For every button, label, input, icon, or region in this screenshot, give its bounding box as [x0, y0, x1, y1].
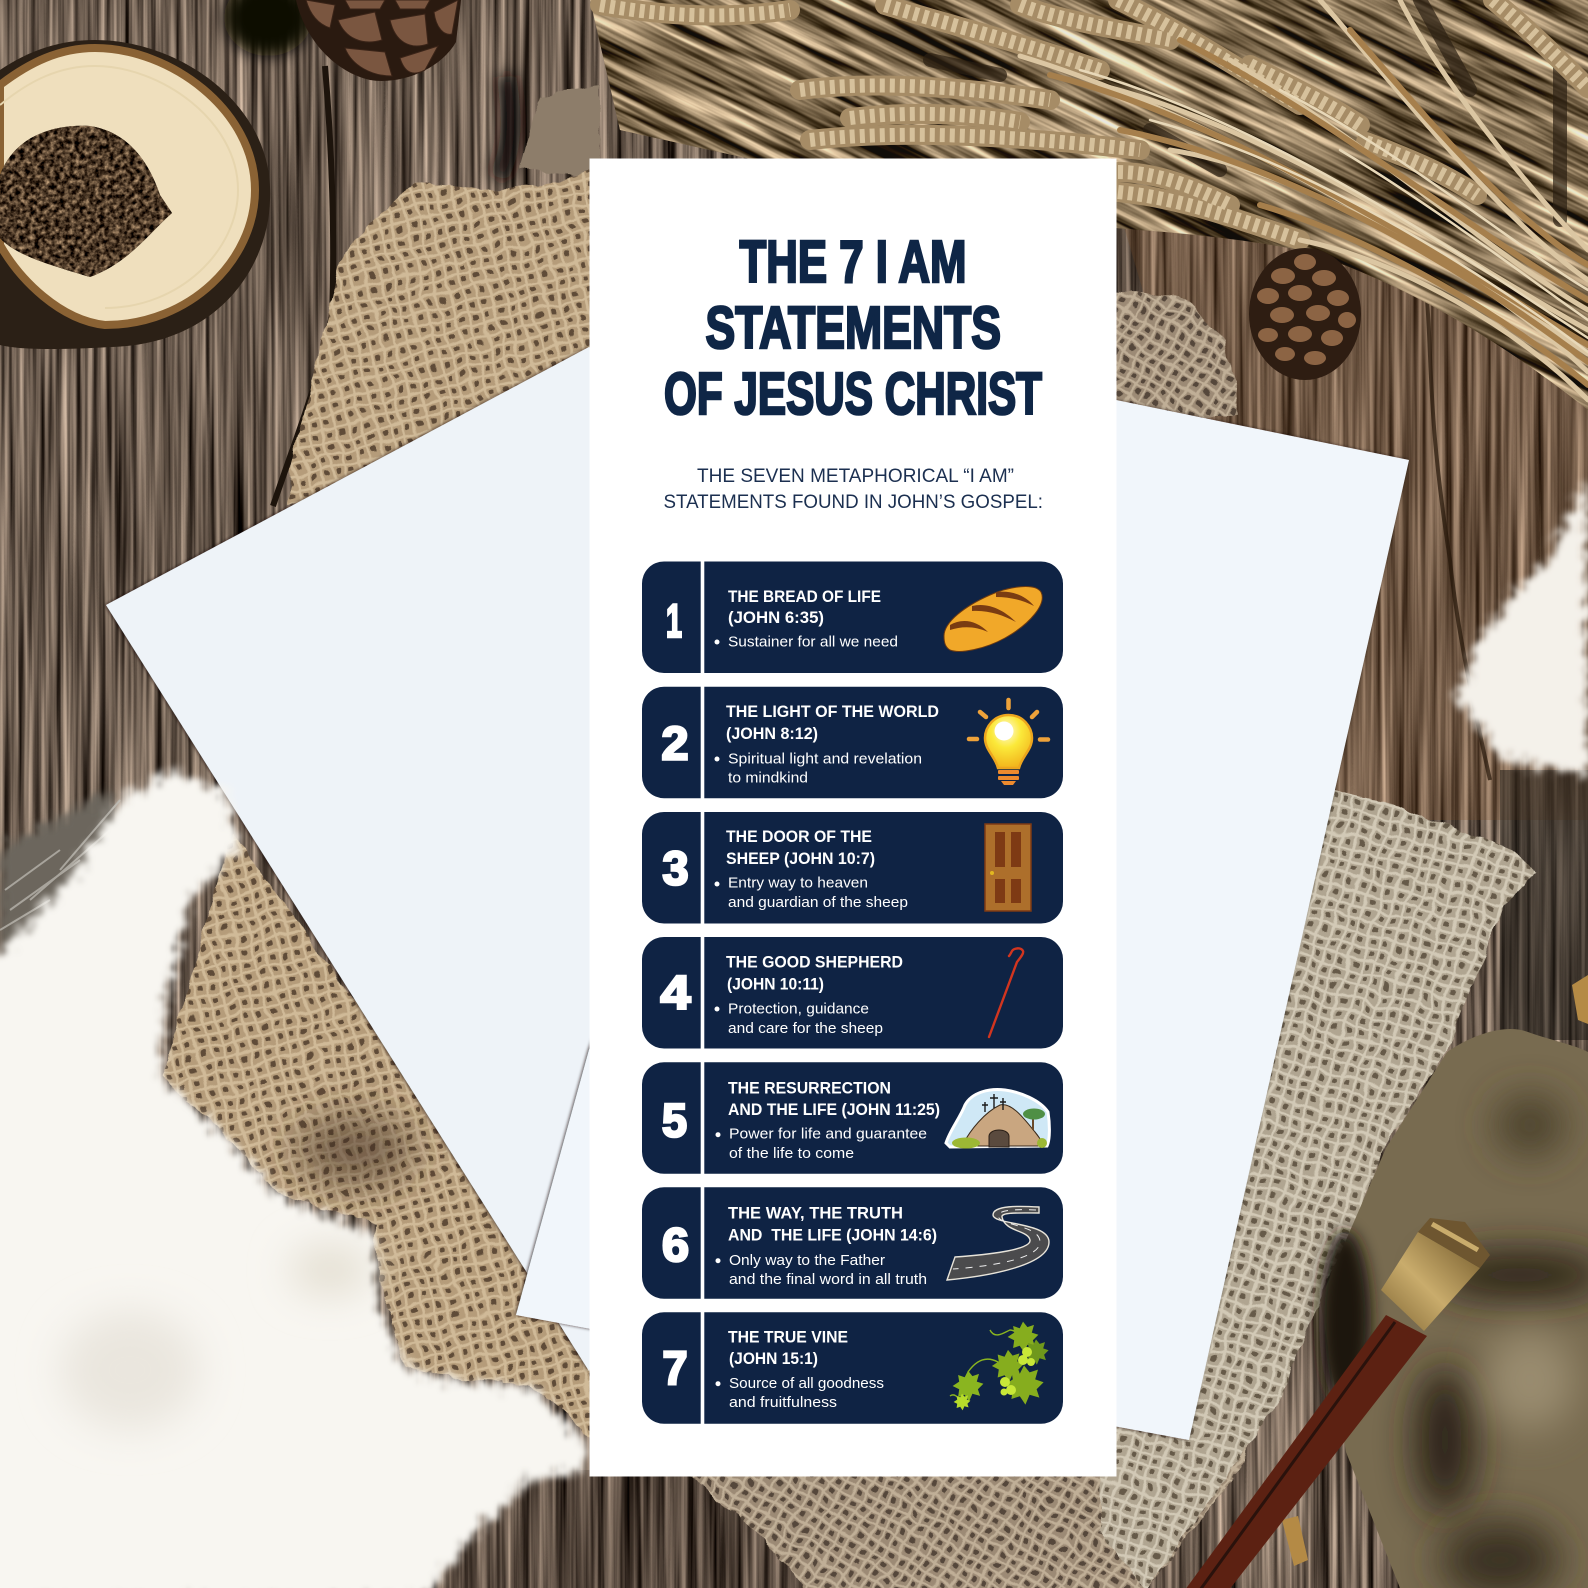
- statement 7: true vine: and fruitfulness: [729, 1395, 837, 1411]
- icon: empty tomb: [946, 1090, 1049, 1148]
- statement 1: bread of life: Sustainer for all we need: [728, 634, 898, 650]
- title: THE 7 I AM: [740, 229, 966, 295]
- statement 2: light of the world: Spiritual light and revelation: [728, 751, 922, 767]
- statement 5: resurrection and the life: [642, 1062, 1063, 1174]
- statement 1: bread of life: 1: [666, 594, 682, 647]
- statement 4: good shepherd: THE GOOD SHEPHERD: [726, 954, 903, 972]
- statement 7: true vine: (JOHN 15:1): [729, 1350, 818, 1368]
- statement 6: way truth life: 6: [662, 1218, 689, 1271]
- icon: bread loaf: [944, 587, 1042, 651]
- icon: grape vine: [950, 1322, 1049, 1410]
- gold accents: [1282, 975, 1588, 1566]
- statement 4: good shepherd: [642, 937, 1063, 1048]
- statement 3: door of the sheep: SHEEP (JOHN 10:7): [726, 850, 875, 868]
- statement 5: resurrection and the life: AND THE LIFE (JOHN 11:25): [728, 1101, 940, 1119]
- walking cane: [1185, 1218, 1490, 1588]
- statement 6: way truth life: [642, 1187, 1063, 1299]
- statement 5: resurrection and the life: 5: [662, 1094, 687, 1146]
- burlap cloth: right: [1100, 790, 1538, 1588]
- burlap cloth: bottom: [590, 1300, 1300, 1588]
- statement 1: bread of life: (JOHN 6:35): [728, 609, 824, 627]
- statement 2: light of the world: to mindkind: [728, 770, 808, 786]
- icon: winding road: [947, 1206, 1049, 1280]
- statement 3: door of the sheep: 3: [662, 842, 688, 894]
- statement 7: true vine: Source of all goodness: [729, 1376, 884, 1392]
- statement 4: good shepherd: and care for the sheep: [728, 1021, 883, 1037]
- blank paper sheet front: [516, 400, 1409, 1440]
- subtitle: THE SEVEN METAPHORICAL “I AM”: [697, 465, 1014, 487]
- wheat bundle top right: [590, 0, 1588, 410]
- icon: shepherd staff: [989, 948, 1023, 1037]
- statement 6: way truth life: Only way to the Father: [729, 1253, 885, 1269]
- statement 7: true vine: 7: [662, 1342, 688, 1394]
- statement 1: bread of life: THE BREAD OF LIFE: [728, 588, 881, 606]
- white fur bottom left: [0, 770, 589, 1588]
- subtitle: [664, 465, 1043, 513]
- statement 1: bread of life: [642, 562, 1063, 673]
- statement 3: door of the sheep: [642, 812, 1063, 924]
- statement 5: resurrection and the life: Power for life and guarantee: [729, 1127, 927, 1143]
- pine cone right: [1249, 248, 1361, 380]
- statement 5: resurrection and the life: of the life to come: [729, 1146, 854, 1162]
- white bookmark card: [590, 158, 1116, 1476]
- icon: light bulb: [969, 700, 1048, 785]
- statement 4: good shepherd: 4: [660, 966, 690, 1018]
- icon: wooden door: [985, 824, 1031, 911]
- statement 2: light of the world: 2: [662, 716, 688, 770]
- statement 2: light of the world: THE LIGHT OF THE WORLD: [726, 703, 939, 721]
- statement 5: resurrection and the life: THE RESURRECTION: [728, 1079, 891, 1097]
- subtitle: STATEMENTS FOUND IN JOHN’S GOSPEL:: [664, 491, 1043, 513]
- title: OF JESUS CHRIST: [664, 361, 1042, 427]
- statement 4: good shepherd: Protection, guidance: [728, 1002, 869, 1018]
- wood slice with dark truffle: [0, 40, 270, 349]
- white fur right: [1457, 478, 1588, 778]
- statement 6: way truth life: THE WAY, THE TRUTH: [728, 1205, 903, 1223]
- blank paper sheet back: [106, 347, 800, 1371]
- statement 3: door of the sheep: and guardian of the sheep: [728, 895, 908, 911]
- statement 2: light of the world: (JOHN 8:12): [726, 725, 818, 743]
- burlap cloth: lower left: [162, 834, 900, 1588]
- statement 4: good shepherd: (JOHN 10:11): [727, 975, 824, 993]
- statement 6: way truth life: AND THE LIFE (JOHN 14:6): [728, 1226, 937, 1244]
- statement 3: door of the sheep: Entry way to heaven: [728, 876, 868, 892]
- burlap cloth: upper left: [289, 165, 600, 505]
- statement 2: light of the world: [642, 687, 1063, 798]
- statement 6: way truth life: and the final word in all truth: [729, 1272, 927, 1288]
- title: STATEMENTS: [706, 295, 1001, 361]
- statement 7: true vine: [642, 1312, 1063, 1424]
- olive cloth bottom right: [1319, 1029, 1588, 1588]
- burlap cloth: upper right lump: [1100, 290, 1240, 415]
- title: [664, 229, 1042, 427]
- statement 3: door of the sheep: THE DOOR OF THE: [726, 828, 872, 846]
- pine cone top: [224, 0, 461, 81]
- statement 7: true vine: THE TRUE VINE: [728, 1328, 848, 1346]
